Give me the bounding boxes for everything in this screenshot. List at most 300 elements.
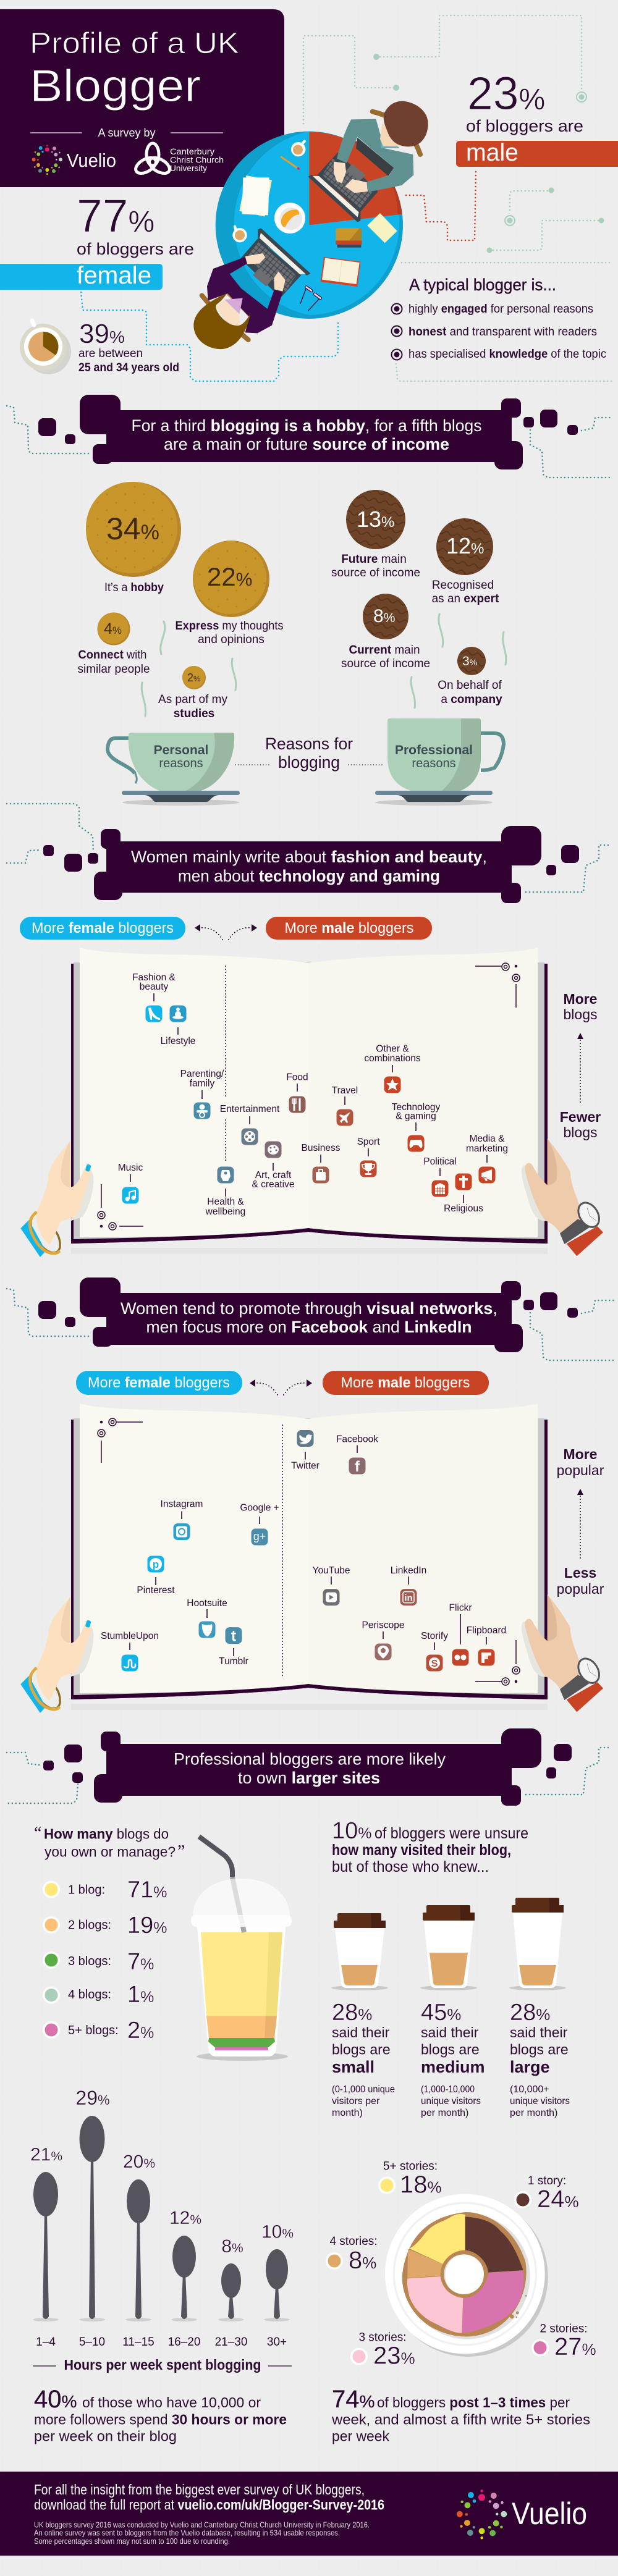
- stat: 77% female: [0, 190, 194, 290]
- question: how many blogs: How many blogs do: [44, 1826, 169, 1842]
- label 5+ stories: 18%: [400, 2171, 442, 2198]
- stat: large blogs: per month): [510, 2108, 557, 2118]
- biscuit 22%: [193, 541, 269, 617]
- footer call to action: For all the insight from the biggest ever survey of UK bloggers,: [34, 2481, 365, 2498]
- stat: 77% female: 77%: [77, 190, 154, 242]
- stat: large blogs: said their: [510, 2024, 568, 2040]
- topic: art craft and creative: & creative: [252, 1179, 294, 1190]
- network: linkedin: [391, 1565, 426, 1606]
- spoon chart: hours per week: [30, 2087, 294, 2373]
- chair man: [373, 112, 420, 154]
- topic: fashion and beauty: [132, 972, 176, 1022]
- stat: 39% age with coffee icon: 25 and 34 years old: [78, 361, 179, 374]
- table items: [232, 141, 397, 311]
- reasons for blogging label: blogging: [278, 753, 340, 772]
- left hand: [20, 1142, 93, 1257]
- biscuit 3%: [457, 647, 486, 675]
- spoon 1-4 hours: [30, 2145, 62, 2319]
- network: storify: [421, 1631, 448, 1672]
- label 2 stories: 2 stories:: [540, 2322, 588, 2335]
- network: periscope: Periscope: [362, 1620, 404, 1631]
- reasons for blogging label: Reasons for: [265, 734, 353, 753]
- 4 blogs: 4 blogs:: [68, 1988, 111, 2001]
- stat: small blogs: small: [332, 2058, 375, 2076]
- smoothie cup chart: [191, 1837, 292, 2061]
- spoon 16-20 hours: 12%: [169, 2208, 201, 2228]
- network: storify: Storify: [421, 1631, 448, 1641]
- biscuit 22%: 22%: [207, 562, 252, 591]
- legend pills: topics: [195, 924, 257, 940]
- visitors intro text: [332, 1818, 528, 1875]
- topic: other and combinations: combinations: [364, 1053, 421, 1064]
- text: 74% post frequency: per week: [332, 2428, 389, 2444]
- label 4 stories: 8%: [349, 2247, 376, 2274]
- stat: 77% female: female: [77, 262, 151, 289]
- label 2 stories: [531, 2322, 596, 2360]
- biscuit 34%: 34%: [106, 511, 159, 546]
- text: 74% post frequency: week, and almost a fifth write 5+ stories: [331, 2412, 590, 2428]
- banner: larger sites: Professional bloggers are more likely: [174, 1749, 446, 1768]
- question: how many blogs: [34, 1824, 185, 1861]
- stat: medium blogs: blogs are: [421, 2041, 480, 2057]
- title: Profile of a UK: [30, 27, 239, 60]
- 3 blogs: 3 blogs:: [68, 1955, 111, 1968]
- 3 blogs: [43, 1949, 154, 1975]
- stat: 23% male: male: [466, 139, 519, 166]
- topic: business: [302, 1143, 341, 1184]
- stat: large blogs: blogs are: [510, 2041, 569, 2057]
- question: how many blogs: ”: [177, 1842, 185, 1861]
- stat: medium blogs: medium: [421, 2058, 485, 2076]
- connector dotted lines: header: [81, 15, 612, 381]
- network: flipboard: Flipboard: [467, 1625, 506, 1636]
- Canterbury Christ Church University logo: [133, 143, 224, 177]
- topic: food: [286, 1072, 308, 1113]
- 5+ blogs: 5+ blogs:: [68, 2024, 119, 2037]
- axis labels: 11–15: [122, 2336, 154, 2349]
- axis: more or fewer blogs: [560, 991, 601, 1140]
- biscuit 13%: 13%: [357, 507, 394, 532]
- text: 40% followers: of those who have 10,000 or: [82, 2394, 261, 2410]
- 4 blogs: 1%: [127, 1982, 154, 2008]
- footer notes: [34, 2521, 370, 2546]
- axis title: Hours per week spent blogging: [64, 2357, 261, 2373]
- stat: medium blogs: (1,000-10,000: [421, 2084, 475, 2095]
- label 5+ stories: [378, 2160, 442, 2198]
- typical blogger list: has specialised knowledge of the topic: [408, 348, 606, 361]
- pill: more male networks: More male bloggers: [341, 1374, 470, 1391]
- network: google plus: Google +: [240, 1503, 279, 1513]
- axis labels: 5–10: [79, 2336, 105, 2349]
- label 4 stories: 4 stories:: [329, 2235, 378, 2248]
- network: tumblr: [219, 1627, 248, 1667]
- network: instagram: [161, 1499, 203, 1540]
- title emphasis: Blogger: [30, 61, 201, 111]
- banner: topics: Women mainly write about fashion and beauty,: [131, 848, 487, 866]
- spoon 21-30 hours: [221, 2236, 243, 2319]
- topic: food: Food: [286, 1072, 308, 1082]
- topic: parenting: family: [190, 1079, 214, 1088]
- 2 blogs: [43, 1913, 167, 1938]
- label future: Future main: [341, 553, 407, 566]
- network: hootsuite: Hootsuite: [187, 1598, 227, 1609]
- label current: Current main: [349, 644, 420, 657]
- stat: 77% female: of bloggers are: [77, 240, 194, 258]
- label expert: as an expert: [432, 592, 499, 605]
- network: periscope: [362, 1620, 404, 1661]
- topic: entertainment: Entertainment: [220, 1104, 280, 1114]
- cup: personal reasons: reasons: [159, 757, 203, 770]
- stat: small blogs: said their: [332, 2024, 390, 2040]
- topic: health and wellbeing: Health &: [207, 1197, 244, 1207]
- banner: larger sites: to own larger sites: [238, 1769, 380, 1787]
- axis: more or fewer blogs: blogs: [564, 1124, 597, 1140]
- label 1 story: 1 story:: [528, 2174, 566, 2187]
- network: pinterest: p: [153, 1559, 159, 1570]
- man blogger: [308, 101, 428, 222]
- cup: professional reasons: Professional: [395, 743, 473, 757]
- stat: large blogs: unique visitors: [510, 2096, 570, 2107]
- topic: media and marketing: [466, 1134, 508, 1184]
- spoon 21-30 hours: 8%: [221, 2236, 243, 2257]
- reasons for blogging label: [235, 734, 383, 772]
- text: 40% followers: [34, 2386, 287, 2444]
- label company: [438, 679, 502, 706]
- donut chart: stories per week: [326, 2160, 596, 2369]
- spoon 16-20 hours: [169, 2208, 201, 2319]
- axis labels: 1–4: [36, 2336, 56, 2349]
- label express: Express my thoughts: [176, 620, 283, 633]
- footer Vuelio logo: Vuelio: [512, 2496, 587, 2531]
- pill: more female: [20, 917, 185, 940]
- banner: hobby and income: are a main or future source of income: [164, 435, 449, 453]
- network: youtube: YouTube: [313, 1565, 350, 1576]
- label connect: Connect with: [78, 649, 147, 662]
- woman blogger: [193, 228, 310, 349]
- Canterbury Christ Church University logo: Canterbury: [170, 146, 214, 156]
- stat: 23% male: [456, 67, 618, 167]
- topic: other and combinations: [364, 1044, 421, 1093]
- label connect: [78, 649, 150, 676]
- banner: topics: men about technology and gaming: [178, 867, 440, 885]
- banner: visual networks: [7, 1277, 615, 1360]
- network: instagram: Instagram: [161, 1499, 203, 1510]
- footer call to action: download the full report at vuelio.com/uk/Blogger-Survey-2016: [34, 2496, 384, 2512]
- stat: small blogs: blogs are: [332, 2041, 391, 2057]
- stat: medium blogs: said their: [421, 2024, 479, 2040]
- topic: parenting: [180, 1069, 224, 1119]
- label future: source of income: [331, 566, 420, 579]
- axis: more or fewer blogs: blogs: [564, 1006, 597, 1022]
- network: pinterest: [137, 1555, 175, 1596]
- typical blogger list: honest and transparent with readers: [408, 326, 597, 339]
- topic: lifestyle: Lifestyle: [161, 1036, 195, 1046]
- flourish: top right: [475, 963, 520, 1008]
- stat: large blogs: [510, 2000, 570, 2118]
- label company: a company: [441, 693, 502, 706]
- topic: entertainment: [220, 1104, 280, 1145]
- stat: large blogs: (10,000+: [510, 2084, 549, 2095]
- topic: religious: [444, 1174, 483, 1214]
- label company: On behalf of: [438, 679, 502, 692]
- label express: and opinions: [198, 633, 265, 646]
- text: 74% post frequency: 74%: [332, 2386, 375, 2413]
- topic: lifestyle: [161, 1006, 195, 1046]
- topic: political: Political: [423, 1156, 457, 1167]
- footer: [0, 2472, 618, 2556]
- pill: more male: [266, 917, 432, 940]
- 1 blog: [43, 1877, 167, 1903]
- spoon 11-15 hours: [123, 2152, 155, 2319]
- axis: more or less popular: popular: [557, 1581, 604, 1597]
- text: 74% post frequency: [331, 2386, 590, 2444]
- right hand with watch: [522, 1139, 603, 1256]
- topic: media and marketing: Media &: [470, 1134, 505, 1144]
- network: storify: S: [431, 1659, 438, 1669]
- visitors intro text: 10%: [332, 1818, 372, 1844]
- title panel: [0, 9, 284, 187]
- topic: technology and gaming: Technology: [392, 1102, 440, 1113]
- label studies: studies: [174, 707, 214, 720]
- cup: personal reasons: [108, 733, 240, 806]
- stat: medium blogs: 45%: [421, 2000, 461, 2026]
- typical blogger list: A typical blogger is...: [409, 276, 556, 294]
- label hobby: It’s a hobby: [104, 581, 164, 594]
- axis labels: 30+: [267, 2336, 287, 2349]
- visitors intro text: but of those who knew...: [332, 1858, 489, 1875]
- typical blogger list: highly engaged for personal reasons: [408, 303, 593, 316]
- network: linkedin: LinkedIn: [391, 1565, 426, 1576]
- topic: fashion and beauty: beauty: [140, 982, 169, 992]
- 4 blogs: [43, 1982, 154, 2008]
- second open book and hands: [20, 1404, 603, 1713]
- label 1 story: 24%: [537, 2186, 579, 2213]
- pill: more female: More female bloggers: [32, 920, 174, 937]
- text: 40% followers: 40%: [34, 2386, 77, 2413]
- topic: parenting: Parenting/: [180, 1069, 224, 1079]
- topic: art craft and creative: [252, 1142, 294, 1190]
- cup: professional reasons: reasons: [412, 757, 456, 770]
- topic: travel: Travel: [332, 1085, 358, 1096]
- topic: political: [423, 1156, 457, 1197]
- network: stumbleupon: [101, 1631, 159, 1672]
- axis: more or fewer blogs: Fewer: [560, 1109, 601, 1125]
- network: facebook: Facebook: [336, 1434, 378, 1444]
- topic: media and marketing: marketing: [466, 1143, 508, 1154]
- stat: 39% age with coffee icon: are between: [78, 347, 143, 360]
- visitors intro text: of bloggers were unsure: [375, 1825, 528, 1842]
- divider dotted: networks: [282, 1425, 283, 1678]
- typical blogger list: [392, 276, 606, 361]
- stat: large blogs: large: [510, 2058, 550, 2076]
- stat: small blogs: visitors per: [332, 2096, 380, 2107]
- personal reason biscuits: [78, 482, 283, 720]
- biscuit 4%: [98, 613, 130, 645]
- network: twitter: [291, 1430, 320, 1471]
- biscuit 13%: [346, 490, 405, 549]
- 5+ blogs: [43, 2018, 154, 2044]
- open book and hands: [20, 948, 603, 1257]
- axis: more or less popular: popular: [557, 1462, 604, 1478]
- network: hootsuite: [187, 1598, 227, 1638]
- banner: visual networks: men focus more on Facebook and LinkedIn: [146, 1318, 472, 1336]
- stat: medium blogs: unique visitors: [421, 2096, 481, 2107]
- spoon 30+ hours: 10%: [261, 2221, 294, 2242]
- spoon 1-4 hours: 21%: [30, 2145, 62, 2165]
- 1 blog: 71%: [127, 1877, 167, 1903]
- stat: small blogs: (0-1,000 unique: [332, 2084, 395, 2095]
- topic: travel: [332, 1085, 358, 1126]
- Vuelio logo: Vuelio: [67, 149, 116, 171]
- axis: more or less popular: [557, 1446, 604, 1597]
- label studies: As part of my: [158, 693, 227, 706]
- label expert: Recognised: [432, 579, 494, 592]
- network: facebook: f: [355, 1458, 360, 1475]
- illustration: bloggers at round table: [193, 101, 428, 349]
- network: linkedin: in: [404, 1593, 413, 1604]
- pill: more female networks: [76, 1371, 242, 1395]
- stat: 39% age with coffee icon: [20, 319, 179, 374]
- biscuit 2%: 2%: [187, 671, 201, 684]
- question: how many blogs: “: [34, 1824, 41, 1843]
- topic: health and wellbeing: wellbeing: [205, 1206, 245, 1217]
- flourish: bottom left: [98, 1184, 143, 1230]
- footer call to action: [34, 2481, 384, 2512]
- stat: 23% male: of bloggers are: [466, 117, 583, 135]
- 2 blogs: 19%: [127, 1913, 167, 1938]
- pill: more male: More male bloggers: [284, 920, 414, 937]
- footer Vuelio logo: [457, 2490, 587, 2539]
- network: stumbleupon: StumbleUpon: [101, 1631, 159, 1641]
- pill: more male networks: [323, 1371, 489, 1395]
- stat: 39% age with coffee icon: 39%: [79, 319, 125, 349]
- label expert: [432, 579, 499, 605]
- network: flipboard: [467, 1625, 506, 1665]
- 5+ blogs: 2%: [127, 2018, 154, 2044]
- topic: sport: [357, 1137, 380, 1177]
- biscuit 8%: 8%: [373, 606, 395, 626]
- divider dotted: topics: [225, 966, 226, 1163]
- arrow between pills: [250, 1379, 312, 1395]
- network: google plus: g+: [253, 1530, 266, 1543]
- topic: music: [118, 1163, 143, 1203]
- axis: more or less popular: Less: [564, 1565, 596, 1581]
- banner: topics: [7, 826, 611, 903]
- network: google plus: [240, 1503, 279, 1546]
- label express: [176, 620, 283, 646]
- professional reason chocolate biscuits: [331, 490, 502, 706]
- Vuelio logo: [32, 145, 116, 175]
- axis labels: 21–30: [215, 2336, 247, 2349]
- visitors intro text: how many visited their blog,: [332, 1842, 511, 1859]
- label 3 stories: 3 stories:: [358, 2331, 407, 2344]
- network: pinterest: Pinterest: [137, 1585, 175, 1596]
- label future: [331, 553, 420, 579]
- text: 40% followers: more followers spend 30 hours or more: [34, 2412, 287, 2428]
- network: flickr: [449, 1603, 472, 1665]
- stat: small blogs: [332, 2000, 395, 2118]
- coffee cup: large: [509, 1898, 566, 1990]
- banner: larger sites: [7, 1728, 611, 1806]
- biscuit 34%: [86, 482, 181, 577]
- legend: blogs owned: [43, 1877, 167, 2044]
- 2 blogs: 2 blogs:: [68, 1919, 111, 1932]
- text: 74% post frequency: of bloggers post 1–3 times per: [377, 2394, 570, 2410]
- label 2 stories: 27%: [554, 2333, 596, 2360]
- network: tumblr: t: [231, 1628, 237, 1645]
- biscuit 12%: [436, 518, 493, 575]
- axis labels: 16–20: [168, 2336, 200, 2349]
- Canterbury Christ Church University logo: Christ Church: [170, 154, 224, 164]
- label current: [341, 644, 430, 670]
- topic: technology and gaming: [392, 1102, 440, 1151]
- biscuit 3%: 3%: [462, 654, 477, 668]
- label current: source of income: [341, 657, 430, 670]
- footer notes: Some percentages shown may not sum to 100 due to rounding.: [34, 2537, 230, 2546]
- axis: more or less popular: More: [564, 1446, 597, 1462]
- flourish: bottom right: [475, 1640, 520, 1685]
- flourish: top left: [98, 1418, 143, 1463]
- spoon 5-10 hours: 29%: [75, 2087, 110, 2109]
- banner: hobby and income: For a third blogging is a hobby, for a fifth blogs: [131, 416, 482, 435]
- banner: hobby and income: [7, 395, 612, 478]
- spoon 5-10 hours: [75, 2087, 110, 2319]
- 1 blog: 1 blog:: [68, 1883, 105, 1896]
- label 3 stories: 23%: [373, 2342, 415, 2369]
- topic: health and wellbeing: [205, 1166, 245, 1217]
- label studies: [158, 693, 227, 720]
- biscuit 4%: 4%: [104, 620, 122, 638]
- icon: coffee cup pie: [20, 321, 71, 374]
- topic: music: Music: [118, 1163, 143, 1173]
- network: flickr: Flickr: [449, 1603, 472, 1614]
- stat: small blogs: month): [332, 2108, 363, 2118]
- label 3 stories: [350, 2331, 415, 2369]
- banner: visual networks: Women tend to promote through visual networks,: [121, 1299, 497, 1318]
- cup: professional reasons: [375, 718, 504, 806]
- table: [216, 132, 403, 319]
- network: tumblr: Tumblr: [219, 1656, 248, 1667]
- topic: business: Business: [302, 1143, 341, 1153]
- topic: art craft and creative: Art, craft: [255, 1170, 292, 1181]
- footer notes: An online survey was sent to bloggers from the Vuelio database, resulting in 534 usable responses.: [34, 2529, 340, 2538]
- stat: large blogs: 28%: [510, 2000, 550, 2026]
- stat: 23% male: 23%: [467, 67, 545, 119]
- stat: medium blogs: per month): [421, 2108, 468, 2118]
- topic: other and combinations: Other &: [376, 1044, 409, 1054]
- question: how many blogs: you own or manage?: [44, 1843, 176, 1859]
- network: youtube: [313, 1565, 350, 1606]
- axis labels: [36, 2336, 287, 2349]
- plate and donut: [385, 2194, 548, 2357]
- network: facebook: [336, 1434, 378, 1475]
- stat: small blogs: 28%: [332, 2000, 372, 2026]
- spoon 30+ hours: [261, 2221, 294, 2319]
- steam: [142, 614, 506, 716]
- label 1 story: [514, 2174, 579, 2213]
- topic: technology and gaming: & gaming: [396, 1111, 436, 1122]
- stat: medium blogs: [421, 2000, 485, 2118]
- biscuit 12%: 12%: [446, 533, 484, 558]
- topic: religious: Religious: [444, 1203, 483, 1214]
- topic: fashion and beauty: Fashion &: [132, 972, 176, 983]
- axis: more or fewer blogs: More: [564, 991, 597, 1007]
- topic: sport: Sport: [357, 1137, 380, 1147]
- biscuit 2%: [182, 666, 206, 689]
- survey by line: A survey by: [98, 127, 156, 139]
- label 5+ stories: 5+ stories:: [383, 2160, 438, 2173]
- label connect: similar people: [78, 663, 150, 676]
